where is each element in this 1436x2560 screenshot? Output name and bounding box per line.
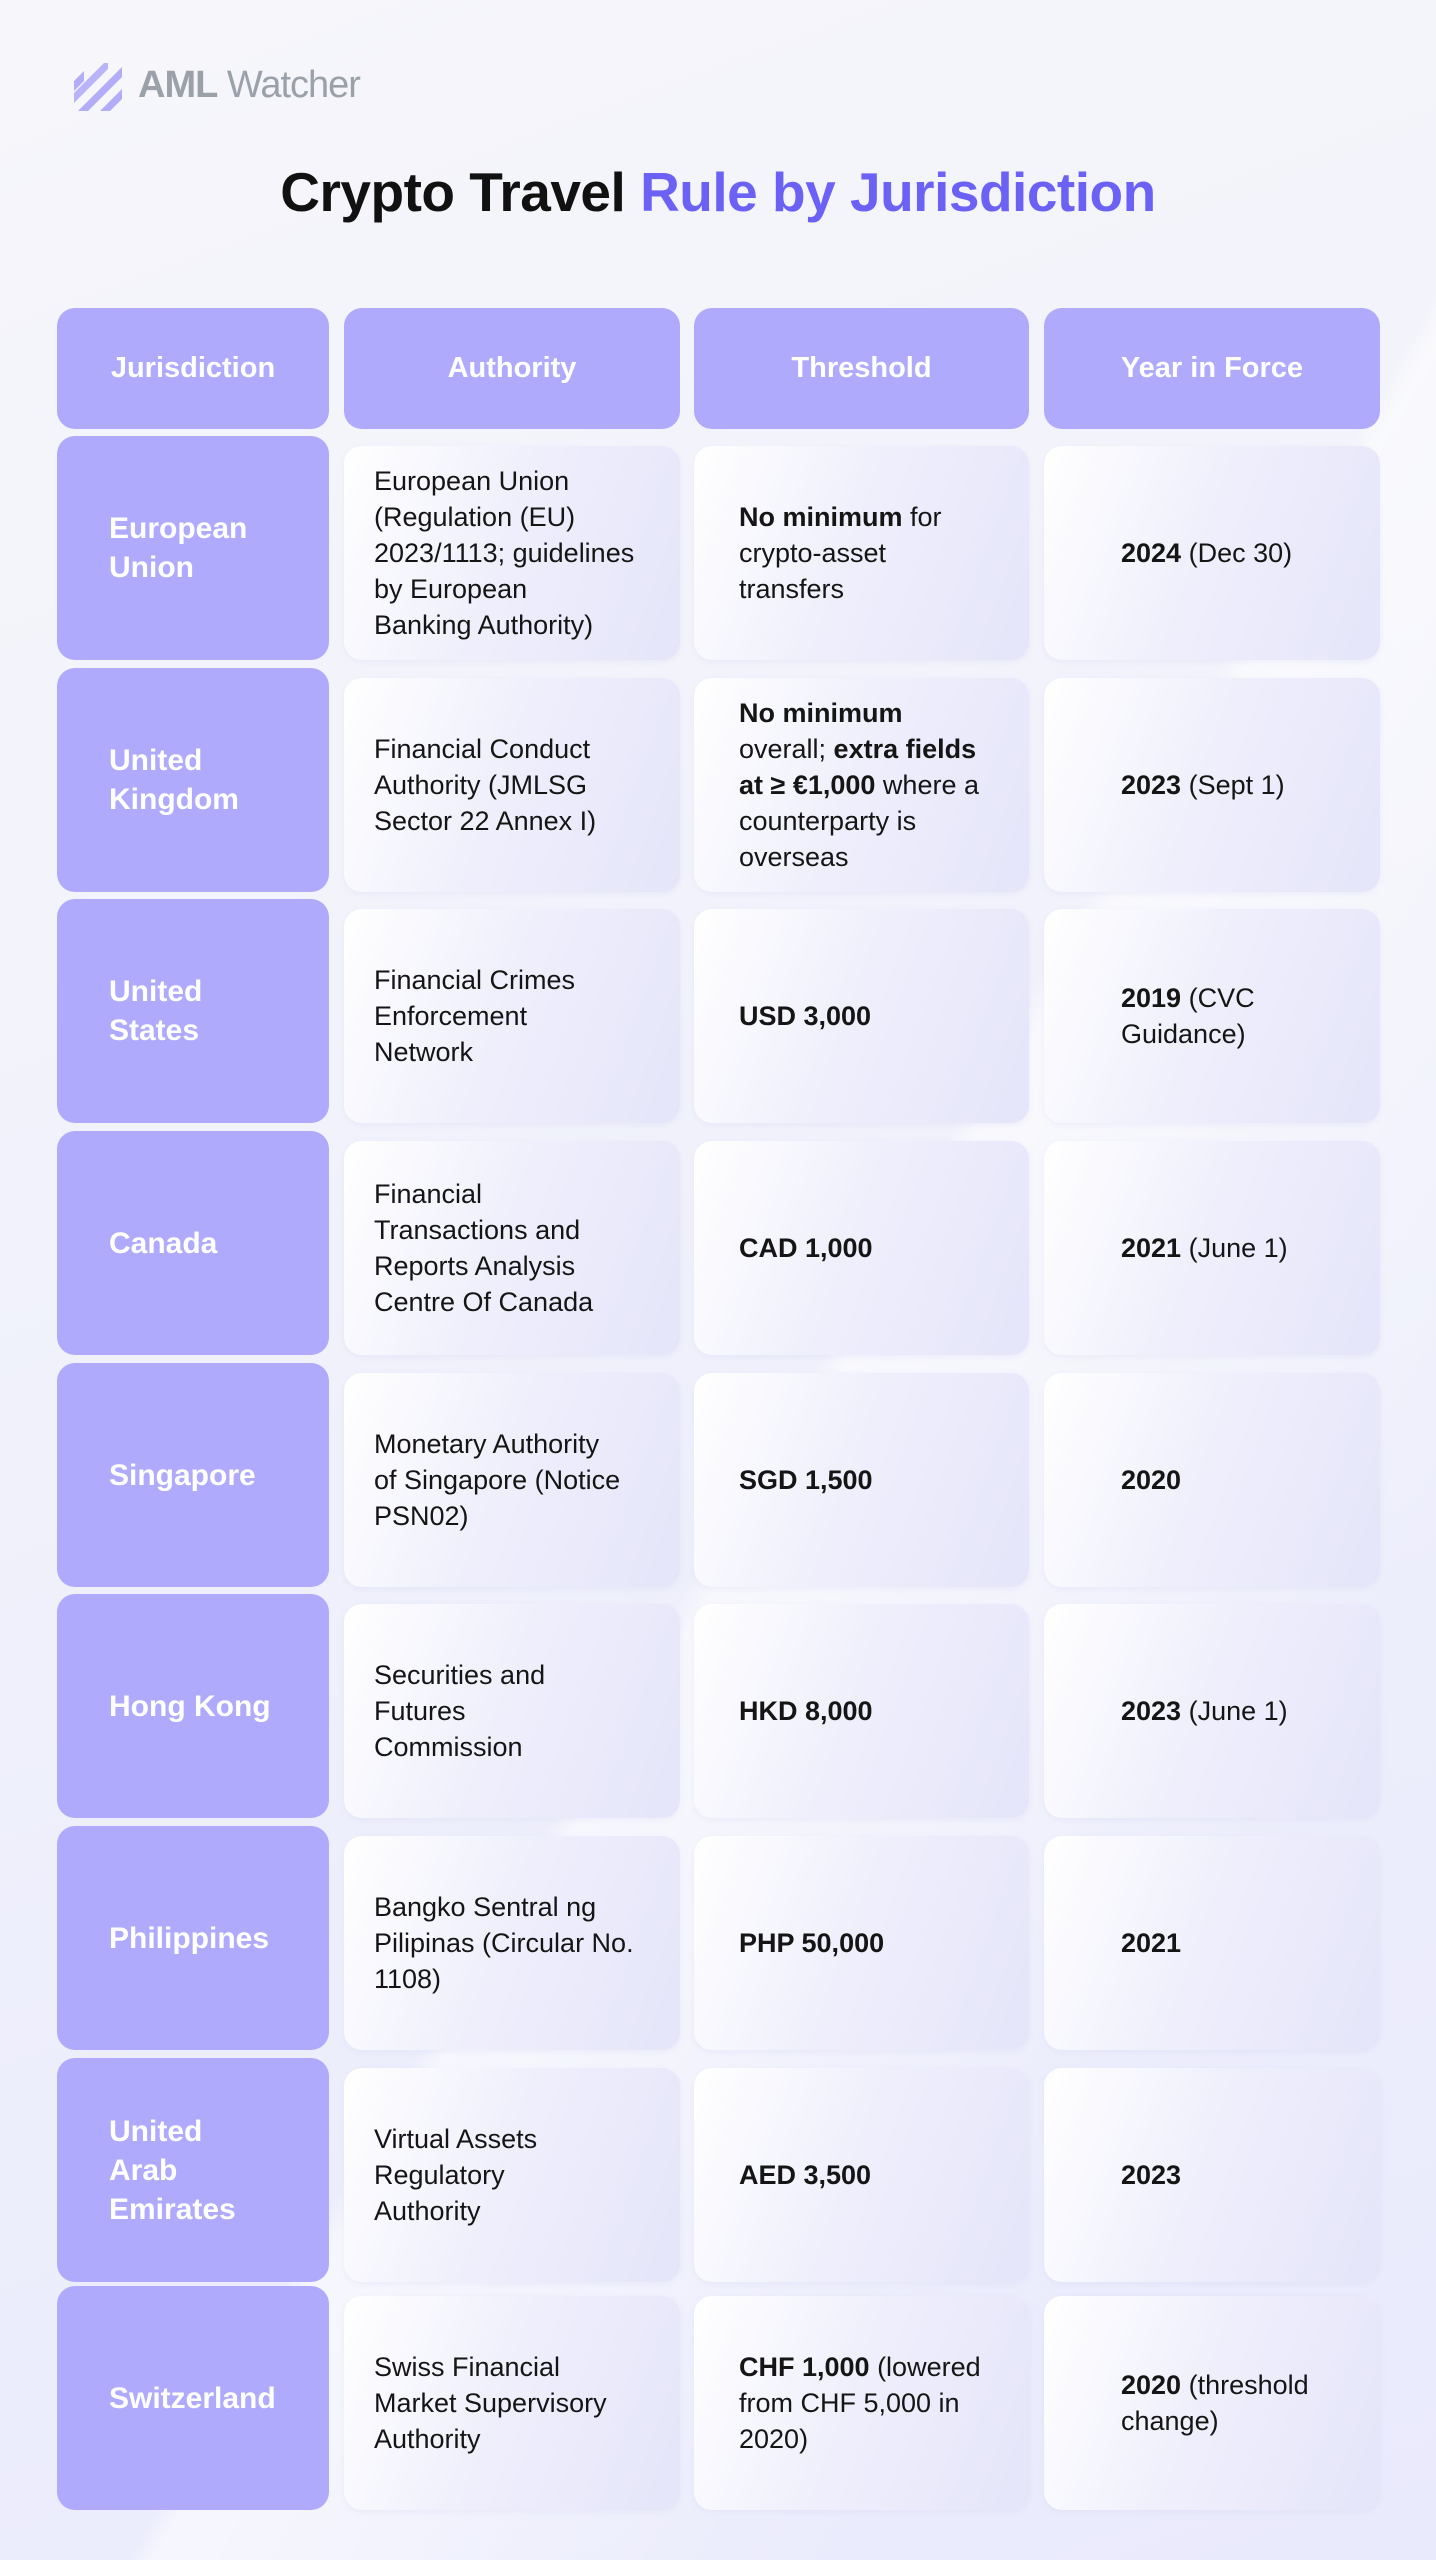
row: Singapore: Monetary Authority: [374, 1429, 599, 1459]
row: United States: Guidance): [1121, 1019, 1246, 1049]
row: United States: Enforcement: [374, 1001, 527, 1031]
row: Switzerland: change): [1121, 2406, 1219, 2436]
row: Hong Kong: Securities and: [374, 1660, 545, 1690]
row: Philippines: Philippines: [109, 1922, 269, 1954]
row: Singapore: SGD 1,500: [739, 1465, 873, 1495]
row: Switzerland: Swiss Financial: [374, 2352, 560, 2382]
row: United Kingdom: No minimum: [739, 698, 903, 728]
row: Switzerland: Authority: [374, 2424, 481, 2454]
row: United Arab Emirates: Emirates: [109, 2192, 236, 2226]
row: United Arab Emirates: United: [109, 2114, 202, 2148]
row: Philippines: [57, 1826, 1181, 2050]
row: Canada: Financial: [374, 1179, 482, 1209]
row: European Union: transfers: [739, 574, 844, 604]
title: Crypto Travel Rule by Jurisdiction: [280, 161, 1156, 223]
row: Canada: Centre Of Canada: [374, 1287, 593, 1317]
row: Singapore: of Singapore (Notice: [374, 1465, 620, 1495]
header row: Threshold: [791, 352, 932, 384]
row: Canada: Canada: [109, 1226, 217, 1260]
row: Singapore: PSN02): [374, 1501, 469, 1531]
header row: Jurisdiction: [111, 352, 275, 384]
row: Singapore: Singapore: [109, 1458, 256, 1492]
row: Hong Kong: [57, 1594, 1380, 1818]
header row: Authority: [448, 352, 576, 384]
row: Switzerland: [57, 2286, 1309, 2510]
header row: Year in Force: [1121, 352, 1303, 384]
row: Switzerland: Market Supervisory: [374, 2388, 607, 2418]
logo text: AML Watcher: [138, 64, 360, 106]
row: United States: States: [109, 1014, 199, 1047]
row: Switzerland: CHF 1,000 (lowered: [739, 2352, 981, 2382]
row: European Union: 2023/1113; guidelines: [374, 538, 634, 568]
row: European Union: by European: [374, 574, 527, 604]
row: Switzerland: 2020 (threshold: [1121, 2370, 1309, 2400]
row: United Kingdom: Financial Conduct: [374, 734, 590, 764]
header row: [57, 308, 1380, 429]
row: United Arab Emirates: AED 3,500: [739, 2160, 871, 2190]
row: Canada: CAD 1,000: [739, 1233, 873, 1263]
row: Philippines: Bangko Sentral ng: [374, 1892, 596, 1922]
row: United Kingdom: overseas: [739, 842, 849, 872]
row: United States: Network: [374, 1037, 473, 1067]
row: Hong Kong: Commission: [374, 1732, 523, 1762]
row: Philippines: Pilipinas (Circular No.: [374, 1928, 634, 1958]
row: United States: United: [109, 975, 202, 1008]
row: European Union: European Union: [374, 466, 569, 496]
row: European Union: Union: [109, 551, 194, 584]
row: Singapore: 2020: [1121, 1465, 1181, 1495]
row: United Arab Emirates: Arab: [109, 2154, 177, 2186]
row: Philippines: 2021: [1121, 1928, 1181, 1958]
row: United Arab Emirates: 2023: [1121, 2160, 1181, 2190]
row: Singapore: [57, 1363, 1380, 1587]
row: United Arab Emirates: [57, 2058, 1182, 2282]
row: United Arab Emirates: Virtual Assets: [374, 2124, 537, 2154]
row: Canada: 2021 (June 1): [1121, 1233, 1288, 1263]
row: United States: [57, 899, 1380, 1123]
table: [57, 308, 1380, 2286]
row: European Union: Banking Authority): [374, 610, 593, 640]
row: European Union: crypto-asset: [739, 538, 886, 568]
row: United Kingdom: Sector 22 Annex I): [374, 806, 596, 836]
row: European Union: (Regulation (EU): [374, 502, 575, 532]
row: Hong Kong: Futures: [374, 1696, 466, 1726]
row: Canada: Transactions and: [374, 1215, 580, 1245]
row: Canada: [57, 1131, 1380, 1355]
row: United States: 2019 (CVC: [1121, 983, 1255, 1013]
row: Canada: Reports Analysis: [374, 1251, 575, 1281]
row: Switzerland: from CHF 5,000 in: [739, 2388, 960, 2418]
row: United Kingdom: overall; extra fields: [739, 734, 976, 764]
row: Philippines: 1108): [374, 1964, 441, 1994]
row: United Kingdom: 2023 (Sept 1): [1121, 770, 1285, 800]
row: Philippines: PHP 50,000: [739, 1928, 884, 1958]
row: United Kingdom: counterparty is: [739, 806, 916, 836]
row: Hong Kong: 2023 (June 1): [1121, 1696, 1288, 1726]
row: European Union: [57, 436, 1380, 660]
row: European Union: No minimum for: [739, 502, 942, 532]
row: United States: Financial Crimes: [374, 965, 575, 995]
row: United Kingdom: Kingdom: [109, 783, 239, 816]
row: United Kingdom: Authority (JMLSG: [374, 770, 587, 800]
row: United Kingdom: United: [109, 744, 202, 777]
row: Hong Kong: Hong Kong: [109, 1690, 271, 1722]
row: United Arab Emirates: Authority: [374, 2196, 481, 2226]
row: European Union: European: [109, 512, 247, 545]
row: United Kingdom: at ≥ €1,000 where a: [739, 770, 979, 800]
row: Switzerland: Switzerland: [109, 2382, 276, 2414]
icon: logo stripes: [74, 63, 122, 111]
row: United Arab Emirates: Regulatory: [374, 2160, 505, 2190]
row: Hong Kong: HKD 8,000: [739, 1696, 873, 1726]
row: United States: USD 3,000: [739, 1001, 871, 1031]
row: Switzerland: 2020): [739, 2424, 808, 2454]
row: United Kingdom: [57, 668, 1380, 892]
row: European Union: 2024 (Dec 30): [1121, 538, 1292, 568]
logo: [74, 63, 360, 111]
